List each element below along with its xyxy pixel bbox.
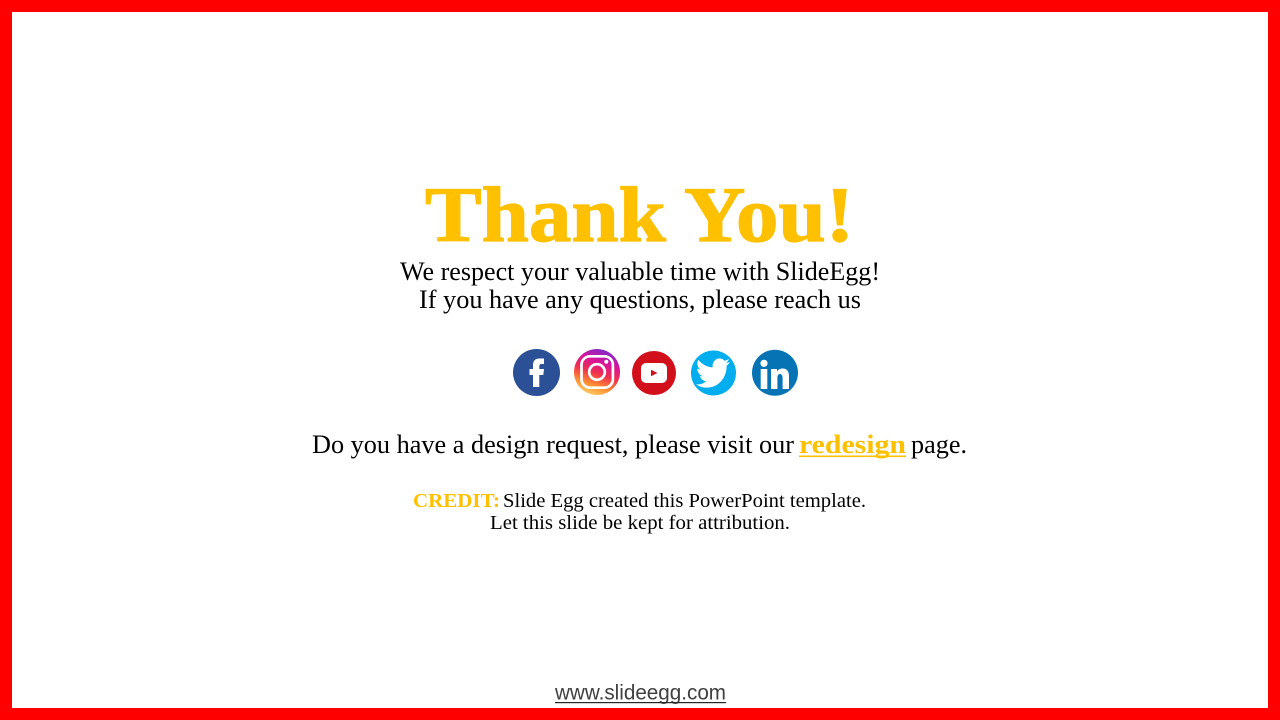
social icons row bbox=[513, 349, 798, 396]
icon: facebook bbox=[513, 349, 560, 396]
icon: instagram bbox=[574, 349, 620, 395]
intro text bbox=[400, 257, 880, 314]
website link: www.slideegg.com bbox=[554, 682, 726, 704]
design request line: page. bbox=[911, 430, 967, 459]
icon: linkedin bbox=[752, 350, 798, 396]
title: Thank You! bbox=[425, 171, 854, 258]
intro text: We respect your valuable time with SlideEgg! bbox=[400, 257, 880, 286]
credit text: Slide Egg created this PowerPoint template. bbox=[503, 490, 866, 512]
icon: twitter bbox=[691, 350, 736, 396]
credit text bbox=[413, 490, 866, 534]
intro text: If you have any questions, please reach us bbox=[419, 285, 861, 314]
redesign link: redesign bbox=[799, 430, 907, 459]
icon: youtube bbox=[632, 351, 676, 395]
design request line: Do you have a design request, please visit our bbox=[312, 430, 794, 459]
credit text: Let this slide be kept for attribution. bbox=[490, 512, 790, 534]
credit text: CREDIT: bbox=[413, 490, 500, 512]
